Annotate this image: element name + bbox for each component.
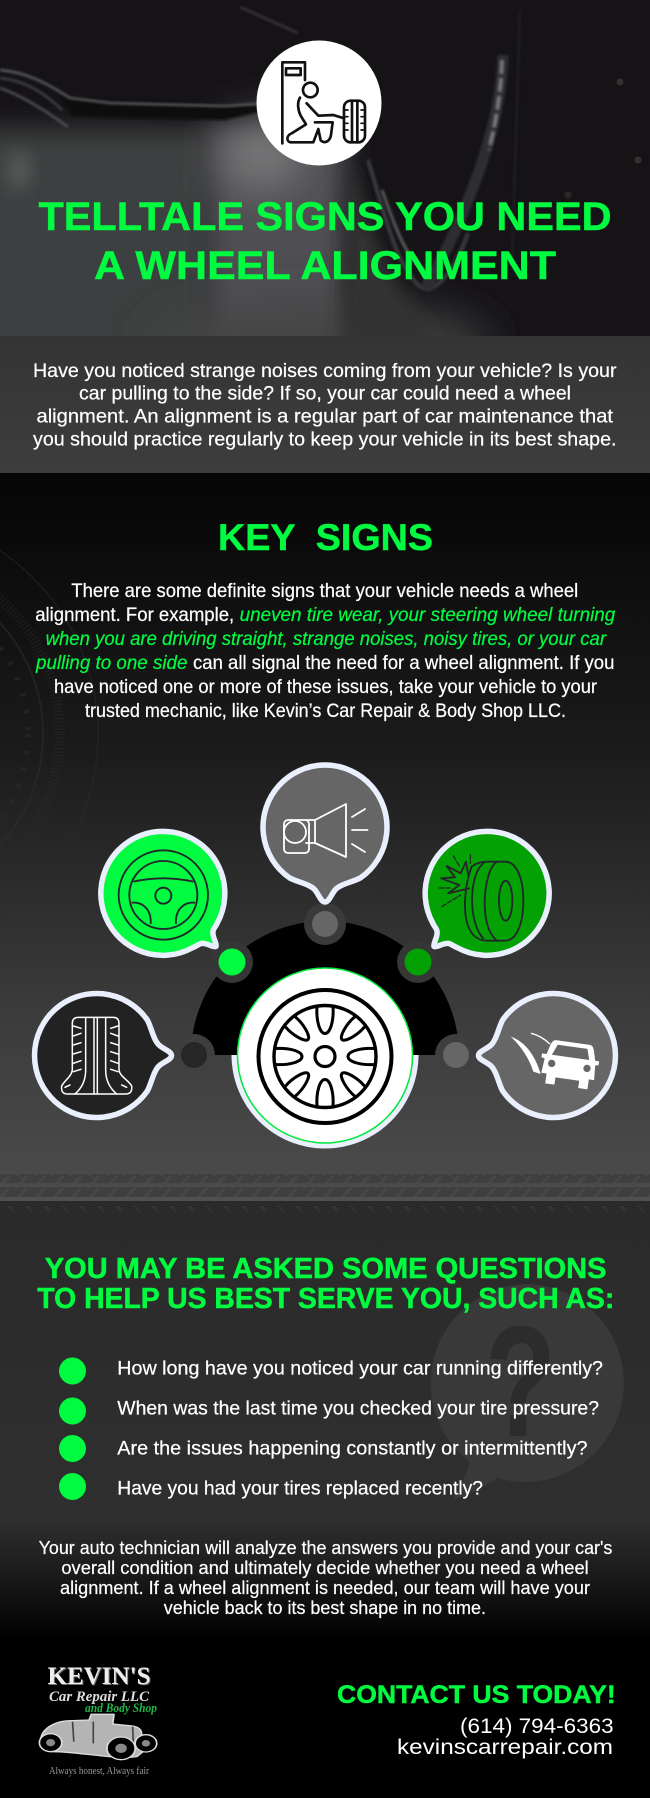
contact block [337,1681,616,1759]
heading: questions [37,1253,614,1315]
logo: Kevin's Car Repair: Always honest, Always fair [49,1766,149,1777]
bullet and question 4 [59,1473,483,1500]
title: A WHEEL ALIGNMENT [94,244,556,288]
closing paragraph: vehicle back to its best shape in no time. [164,1598,486,1618]
bubble: steering wheel [101,831,225,955]
key signs text: There are some definite signs that your vehicle needs a wheel [71,580,578,602]
logo: Kevin's Car Repair: Car Repair LLC [49,1689,150,1705]
contact block: kevinscarrepair.com [397,1736,613,1759]
heading: questions: TO HELP US BEST SERVE YOU, SUCH AS: [37,1283,614,1315]
hero background photo [0,0,650,336]
hero icon: mechanic aligning a wheel [256,40,382,166]
bubble: noises (horn icon) [263,765,387,902]
key signs section background [0,473,650,1201]
central hub diagram [173,903,477,1148]
closing paragraph: alignment. If a wheel alignment is needed, our team will have your [60,1578,590,1598]
logo: Kevin's Car Repair [39,1663,157,1777]
bullet and question 1: How long have you noticed your car running differently? [117,1358,603,1380]
question list [59,1358,603,1500]
key signs text: pulling to one side [35,652,188,674]
key signs text: can all signal the need for a wheel alignment. If you [193,652,614,674]
heading: questions: YOU MAY BE ASKED SOME QUESTIONS [45,1253,607,1285]
closing paragraph: overall condition and ultimately decide whether you need a wheel [61,1558,589,1578]
key signs text [35,580,615,722]
contact block: CONTACT US TODAY! [337,1681,616,1709]
logo: Kevin's Car Repair: KEVIN'S [48,1664,152,1691]
bubble: noisy tire burst [425,831,549,955]
title [38,195,612,288]
intro text: Have you noticed strange noises coming from your vehicle? Is your [33,360,617,382]
tread marks divider [0,1174,650,1201]
questions section background [0,1201,650,1641]
closing paragraph [39,1538,612,1618]
logo: Kevin's Car Repair: KEVIN'S [48,1663,150,1690]
bullet and question 3: Are the issues happening constantly or intermittently? [117,1438,588,1460]
intro text: alignment. An alignment is a regular part of car maintenance that [36,406,614,428]
bubble: uneven tire wear [35,994,172,1118]
contact block: (614) 794-6363 [460,1715,614,1738]
icon: question mark speech bubble watermark: ? [485,1294,556,1470]
icon: question mark speech bubble watermark [431,1284,624,1500]
closing paragraph: Your auto technician will analyze the answers you provide and your car's [39,1538,612,1558]
bullet and question 4: Have you had your tires replaced recently? [117,1478,483,1500]
key signs text: uneven tire wear, your steering wheel turning [240,604,615,626]
intro text [33,360,617,450]
intro panel [0,336,650,473]
intro text: you should practice regularly to keep your vehicle in its best shape. [33,428,616,450]
bubble: car pulling to one side [478,994,615,1118]
intro text: car pulling to the side? If so, your car could need a wheel [79,382,571,404]
key signs text: trusted mechanic, like Kevin’s Car Repair & Body Shop LLC. [85,700,566,722]
footer background [0,1641,650,1798]
heading: key signs: KEY SIGNS [218,517,433,558]
key signs text: have noticed one or more of these issues, take your vehicle to your [54,676,597,698]
title: TELLTALE SIGNS YOU NEED [38,195,612,239]
logo: Kevin's Car Repair: and Body Shop [85,1700,157,1715]
key signs text: when you are driving straight, strange noises, noisy tires, or your car [46,628,607,650]
bullet and question 2: When was the last time you checked your tire pressure? [117,1398,599,1420]
key signs text: alignment. For example, [35,604,234,626]
icon: alloy wheel [238,968,412,1143]
